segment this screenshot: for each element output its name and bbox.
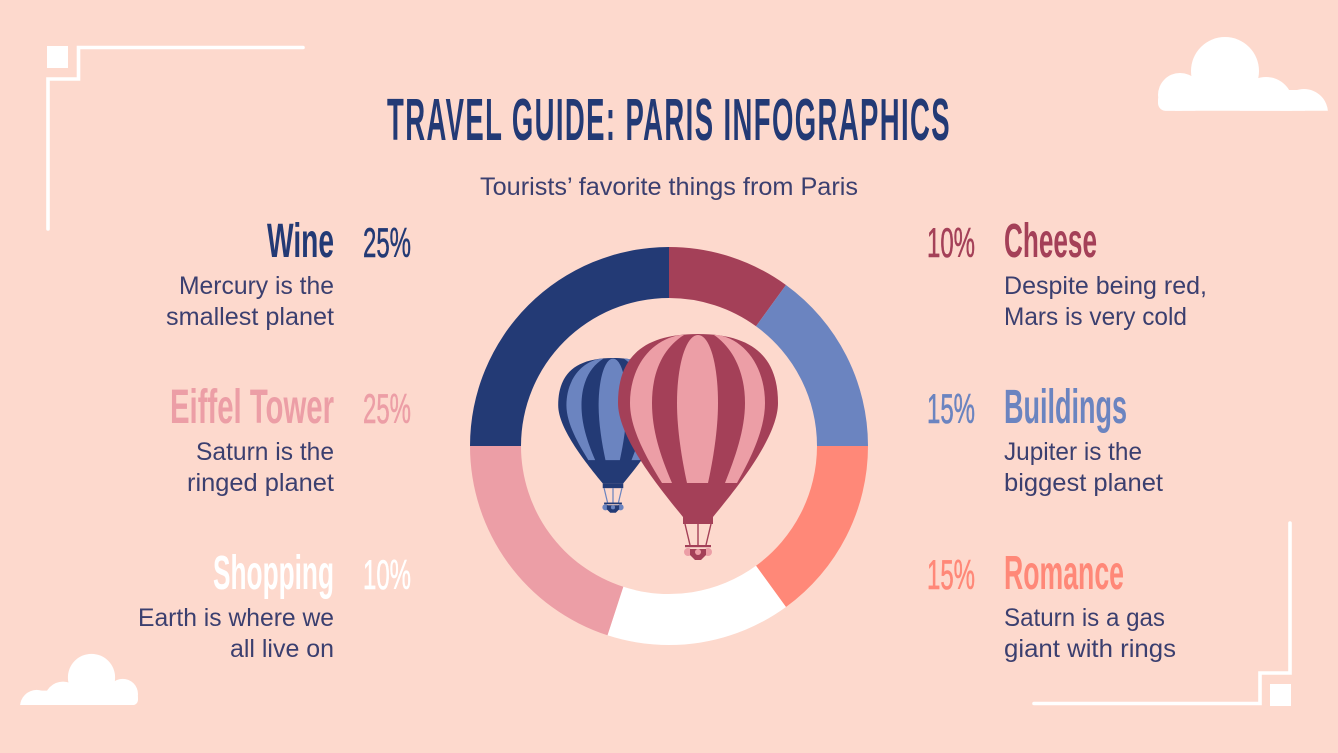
item: romance: Romance bbox=[1004, 547, 1124, 600]
item: shopping: Earth is where we bbox=[138, 604, 334, 632]
item: buildings bbox=[927, 381, 1163, 497]
item: eiffel tower: 25% bbox=[363, 385, 411, 432]
donut chart bbox=[470, 247, 868, 645]
item: wine bbox=[166, 215, 411, 331]
decorative corner frame: top left bbox=[47, 46, 303, 229]
item: cheese: 10% bbox=[927, 219, 975, 266]
item: romance bbox=[927, 547, 1176, 663]
icon: small navy hot air balloon bbox=[558, 358, 668, 513]
item: eiffel tower: ringed planet bbox=[187, 469, 334, 497]
item: romance: giant with rings bbox=[1004, 635, 1176, 663]
item: cheese bbox=[927, 215, 1207, 331]
item: eiffel tower: Eiffel Tower bbox=[170, 381, 334, 434]
segment: wine 25% navy bbox=[470, 247, 669, 446]
item: buildings: biggest planet bbox=[1004, 469, 1163, 497]
item: wine: Wine bbox=[267, 215, 334, 268]
item: buildings: 15% bbox=[927, 385, 975, 432]
item: romance: 15% bbox=[927, 551, 975, 598]
icon: cloud bottom left bbox=[20, 654, 138, 705]
segment: shopping white bbox=[608, 566, 786, 645]
item: cheese: Cheese bbox=[1004, 215, 1097, 268]
item: wine: smallest planet bbox=[166, 303, 334, 331]
item: cheese: Mars is very cold bbox=[1004, 303, 1187, 331]
icon: cloud top right bbox=[1158, 37, 1328, 111]
item: shopping bbox=[138, 547, 411, 663]
item: buildings: Jupiter is the bbox=[1004, 438, 1142, 466]
item: shopping: Shopping bbox=[213, 547, 334, 600]
item: buildings: Buildings bbox=[1004, 381, 1127, 434]
icon: large wine hot air balloon bbox=[618, 334, 778, 560]
item: shopping: all live on bbox=[230, 635, 334, 663]
subtitle: Tourists’ favorite things from Paris bbox=[480, 173, 858, 201]
item: romance: Saturn is a gas bbox=[1004, 604, 1165, 632]
item: shopping: 10% bbox=[363, 551, 411, 598]
segment: cheese 10% bbox=[669, 247, 786, 326]
item: eiffel tower bbox=[170, 381, 411, 497]
item: cheese: Despite being red, bbox=[1004, 272, 1207, 300]
decorative corner frame: bottom right bbox=[1034, 523, 1291, 706]
item: wine: Mercury is the bbox=[179, 272, 334, 300]
item: wine: 25% bbox=[363, 219, 411, 266]
segment: romance 15% bbox=[756, 446, 868, 607]
item: eiffel tower: Saturn is the bbox=[196, 438, 334, 466]
segment: eiffel tower pink bbox=[470, 446, 623, 635]
segment: buildings 15% bbox=[756, 285, 868, 446]
